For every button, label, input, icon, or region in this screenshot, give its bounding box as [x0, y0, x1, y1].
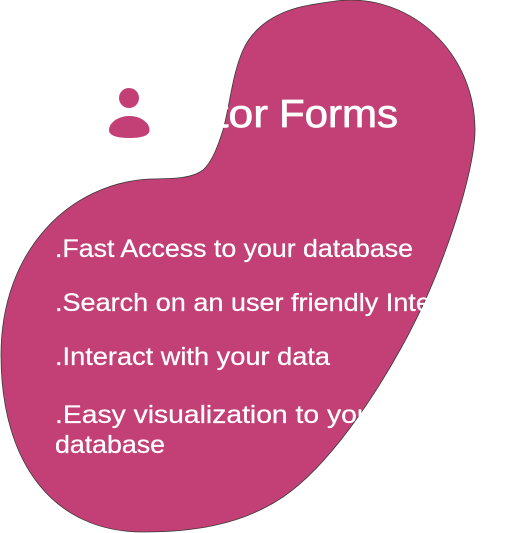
title: Forms — [279, 93, 398, 136]
feature: easy visualization: .Easy visualization to your — [55, 401, 382, 429]
feature: interact: .Interact with your data — [55, 343, 330, 371]
title: Editor — [152, 93, 268, 136]
feature: search: .Search on an user friendly Interface — [55, 289, 491, 317]
feature: easy visualization second line: database — [55, 431, 165, 459]
icon: user — [109, 88, 150, 138]
text block: feature list — [55, 235, 491, 459]
feature: fast access: .Fast Access to your database — [55, 235, 413, 263]
title — [152, 93, 398, 136]
